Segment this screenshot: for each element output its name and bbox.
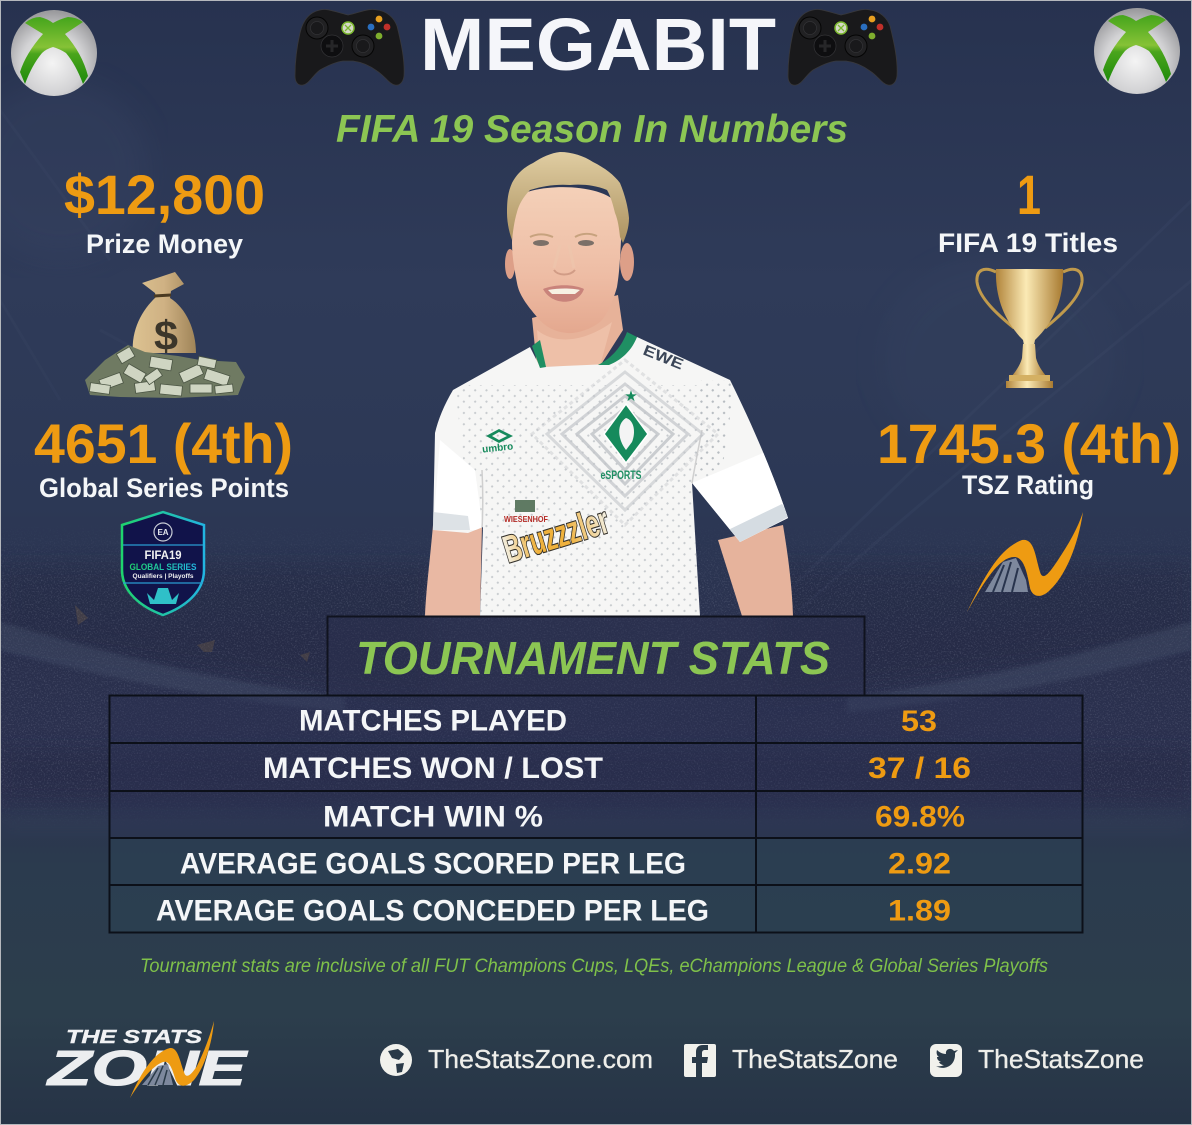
neck (532, 295, 623, 368)
stat: prize money (64, 163, 265, 259)
player photo: eSPORTS (600, 470, 642, 482)
stat: fifa titles: FIFA 19 Titles (938, 228, 1118, 258)
crest (604, 404, 648, 463)
row: matches played (299, 704, 937, 738)
eyes (533, 240, 549, 246)
row: average goals conceded: AVERAGE GOALS CONCEDED PER LEG (156, 894, 709, 928)
icon: global series badge: EA (157, 528, 169, 537)
nose (554, 270, 575, 274)
footer: website: TheStatsZone.com (428, 1044, 653, 1074)
row: match win percent: MATCH WIN % (323, 800, 543, 834)
stat: fifa titles (938, 163, 1118, 258)
icon: facebook (684, 1044, 716, 1077)
panel: stats table (109, 695, 1083, 933)
icon: global series badge: GLOBAL SERIES (130, 562, 196, 572)
stat: tsz rating: 1745.3 (4th) (877, 412, 1181, 475)
icon: xbox logo left (11, 10, 97, 96)
player photo: WIESENHOF (504, 514, 548, 524)
icon: global series badge: FIFA19 (144, 550, 182, 562)
hair (507, 152, 629, 243)
panel: tournament stats header (328, 616, 864, 696)
row: matches won lost (263, 752, 971, 785)
row: matches played: MATCHES PLAYED (299, 704, 567, 738)
player photo: Bruzzzler (498, 500, 614, 572)
player photo: umbro (482, 441, 514, 456)
umbro (486, 429, 513, 443)
icon: money bag (85, 272, 245, 398)
icon: controller left (295, 9, 404, 85)
stat: prize money: Prize Money (86, 229, 243, 259)
ears (505, 249, 515, 279)
footer: twitter handle: TheStatsZone (978, 1044, 1144, 1074)
row: matches won lost: MATCHES WON / LOST (263, 752, 603, 785)
row: average goals scored (180, 848, 951, 880)
row: match win percent: 69.8% (875, 800, 965, 834)
row: average goals conceded: 1.89 (888, 894, 951, 928)
stat: global series points (34, 412, 293, 503)
sponsor (515, 500, 535, 512)
row: match win percent (323, 800, 965, 834)
face (512, 187, 621, 333)
icon: tsz swoosh (967, 512, 1083, 612)
logo: the stats zone (45, 1021, 248, 1098)
subtitle: FIFA 19 Season In Numbers (336, 108, 848, 151)
logo: the stats zone: ZONE (45, 1042, 248, 1096)
row: matches won lost: 37 / 16 (868, 752, 971, 785)
icon: controller right (788, 9, 897, 85)
icon: trophy (977, 269, 1082, 388)
title: MEGABIT (420, 3, 776, 86)
row: average goals scored: AVERAGE GOALS SCORED PER LEG (180, 848, 686, 880)
arms (425, 525, 482, 616)
stat: prize money: $12,800 (64, 163, 265, 226)
footer: facebook handle: TheStatsZone (732, 1044, 898, 1074)
stat: tsz rating: TSZ Rating (962, 470, 1094, 500)
logo: the stats zone: THE STATS (66, 1026, 203, 1047)
mouth (543, 285, 584, 302)
stat: global series points: Global Series Points (39, 473, 289, 503)
footnote: Tournament stats are inclusive of all FUT Champions Cups, LQEs, eChampions League & Global Series Playoffs (140, 956, 1048, 977)
brows (530, 234, 597, 237)
stat: fifa titles: 1 (1017, 163, 1041, 226)
jersey pattern (532, 360, 718, 525)
icon: money bag: $ (154, 312, 178, 359)
player photo: EWE (641, 342, 686, 373)
icon: global series badge: Qualifiers | Playoffs (132, 573, 194, 580)
icon: xbox logo right (1094, 8, 1180, 94)
icon: globe (380, 1044, 412, 1076)
row: matches played: 53 (901, 705, 937, 738)
collar (532, 340, 546, 368)
player photo (425, 152, 793, 616)
jersey (433, 337, 788, 616)
stat: global series points: 4651 (4th) (34, 412, 293, 475)
panel: tournament stats header: TOURNAMENT STATS (356, 632, 830, 684)
icon: twitter (930, 1044, 962, 1077)
player photo: ★ (624, 388, 638, 405)
icon: global series badge (122, 512, 204, 615)
row: average goals scored: 2.92 (888, 848, 951, 880)
